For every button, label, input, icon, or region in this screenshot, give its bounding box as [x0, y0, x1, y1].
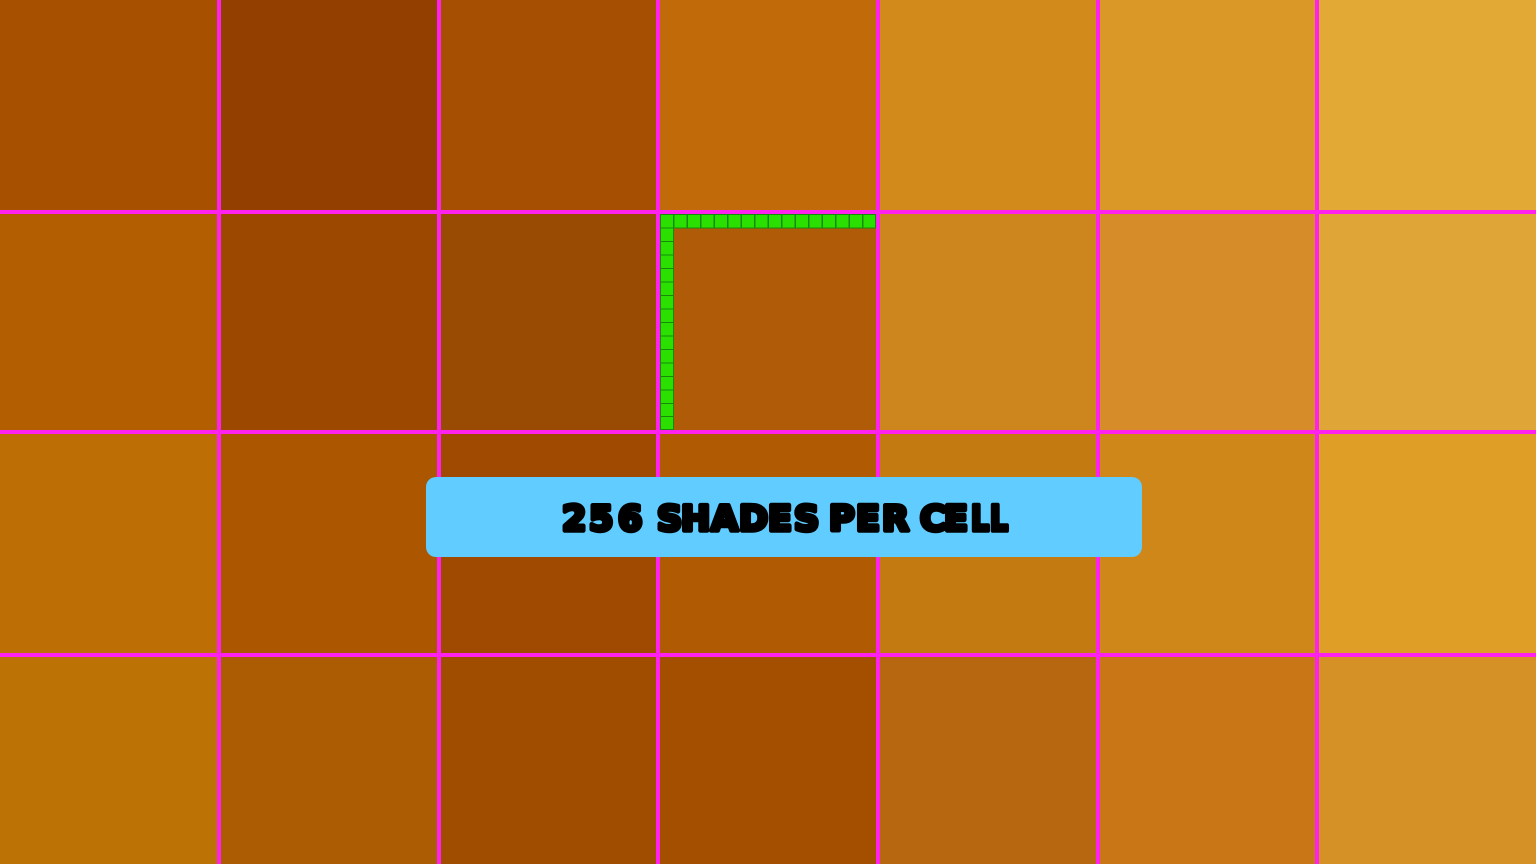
- green left column of 16 sub-cells: [660, 228, 674, 430]
- caption banner: [426, 477, 1142, 557]
- banner text: L: [990, 500, 1008, 540]
- banner text: L: [971, 500, 989, 540]
- banner text: 256 SHADES PER CE: [562, 500, 968, 540]
- green top row of 16 sub-cells: [660, 214, 876, 228]
- banner background: [426, 477, 1142, 557]
